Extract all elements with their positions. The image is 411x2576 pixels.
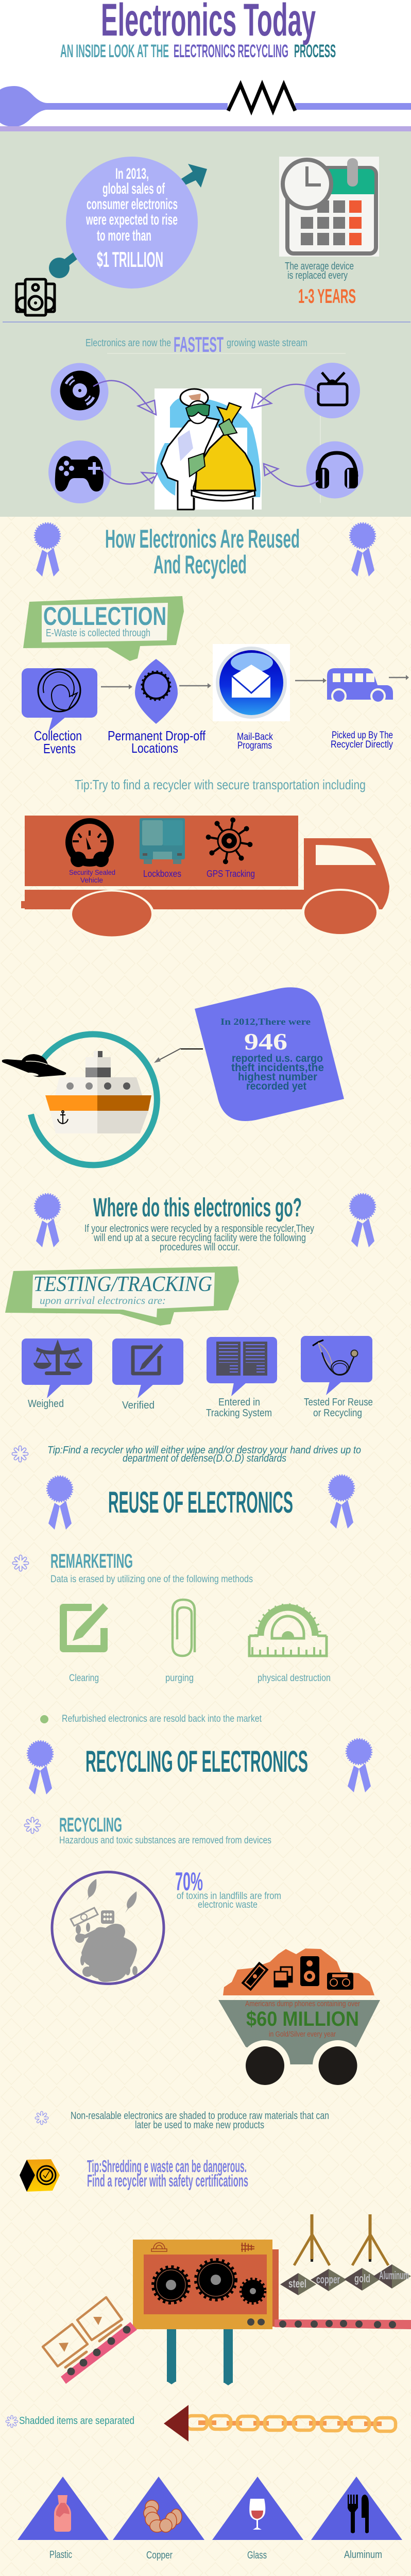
label: entered in tracking system: [206, 1397, 272, 1419]
material: copper: [311, 2269, 347, 2291]
label: clearing: Clearing: [69, 1673, 99, 1684]
illustration: worker holding waste bag: [155, 388, 262, 510]
icon: ribbon left: [35, 1194, 60, 1247]
page background: white header: [0, 0, 411, 131]
tip: wipe or destroy drives: Tip:Find a recycler who will either wipe and/or destroy your hand drives up to: [47, 1445, 361, 1456]
stat bubble: global sales: In 2013,: [115, 165, 149, 182]
card: weighed: [22, 1338, 92, 1398]
label: entered in tracking system: Tracking System: [206, 1408, 272, 1419]
tip: wipe or destroy drives: [47, 1445, 361, 1464]
icon: flower bullet: [14, 1556, 27, 1570]
icon: ribbon right: [346, 1739, 372, 1792]
icon: notebook and pencil: [133, 1344, 163, 1374]
label: glass: Glass: [247, 2550, 267, 2561]
material card: copper: [113, 2477, 204, 2540]
panel: collection speech bubble: E-Waste is collected through: [46, 628, 150, 639]
label: copper: Copper: [146, 2550, 173, 2561]
conveyor: right: [275, 2319, 411, 2329]
icon: bottle: [54, 2495, 71, 2532]
icon: ribbon left: [35, 523, 60, 577]
icon: boombox: [327, 1973, 353, 1990]
text: refurbished electronics: Refurbished electronics are resold back into the market: [62, 1714, 262, 1724]
icon: wine glass: [249, 2499, 265, 2530]
label: picked up by the recycler: [331, 730, 393, 750]
label: permanent drop-off locations: Locations: [131, 740, 178, 756]
icon: flying saucer: [2, 1054, 66, 1077]
text: average device: is replaced every: [287, 270, 348, 281]
label: mail-back programs: Mail-Back: [237, 732, 273, 742]
text: Find a recycler with safety certifications: [87, 2171, 248, 2190]
panel: testing/tracking speech bubble: upon arrival electronics are:: [40, 1294, 166, 1307]
material card: glass: [212, 2477, 303, 2540]
label: aluminum: Aluminum: [344, 2549, 382, 2561]
panel: testing/tracking speech bubble: [5, 1266, 239, 1326]
icon: small protractor: [151, 2243, 167, 2251]
text: toxins in landfills: [177, 1891, 281, 1910]
icon: physical destruction protractor: [249, 1605, 327, 1656]
icon: collection events card: [22, 668, 97, 732]
callout: cargo theft: 946: [244, 1028, 287, 1055]
label: security sealed vehicle: Security Sealed: [69, 868, 115, 876]
text: data erased: Data is erased by utilizing one of the following methods: [50, 1574, 253, 1585]
text: shredded items separated: Shadded items are separated: [19, 2415, 134, 2427]
label: gps tracking: GPS Tracking: [207, 869, 255, 879]
icon: stethoscope: [313, 1340, 357, 1375]
callout: cargo theft: reported u.s. cargo: [232, 1053, 323, 1064]
illustration: shredder machine: [133, 2240, 279, 2385]
text: toxins in landfills: of toxins in landfills are from: [177, 1891, 281, 1902]
arrow: chain pointing left: [164, 2405, 396, 2442]
label: lockboxes: Lockboxes: [143, 869, 181, 879]
callout: cargo theft: [195, 987, 344, 1121]
text: non-resalable electronics: Non-resalable electronics are shaded to produce raw materials that can: [71, 2110, 329, 2122]
text: average device: [285, 261, 354, 281]
icon: flower bullet: [13, 1447, 27, 1461]
circuit line with resistor: [0, 84, 411, 127]
arrow: [295, 678, 327, 683]
icon: purging paperclip: [173, 1600, 195, 1656]
arrow: rising trend: [49, 164, 207, 278]
icon: ship wheel: [202, 814, 256, 868]
text: gold and silver: in Gold/Silver every year: [269, 2030, 336, 2039]
icon: flower bullet: [26, 1819, 39, 1832]
stat bubble: global sales: to more than: [97, 227, 151, 244]
icon: lockbox truck: [140, 818, 185, 864]
illustration: cargo ship in ring: [2, 1034, 157, 1165]
label: collection events: [34, 728, 82, 756]
icon: coins: [144, 2500, 182, 2532]
label: entered in tracking system: Entered in: [218, 1397, 260, 1408]
conveyor: left with boxes: [43, 2297, 137, 2384]
icon: ribbon left: [47, 1477, 72, 1530]
heading: fastest growing waste stream: FASTEST: [174, 332, 224, 357]
label: tested for reuse or recycling: or Recycling: [313, 1408, 362, 1419]
label: collection events: Collection: [34, 728, 82, 743]
callout: cargo theft: In 2012,There were: [220, 1016, 311, 1027]
callout: cargo theft: highest number: [238, 1071, 317, 1083]
panel: collection speech bubble: COLLECTION: [43, 602, 166, 631]
icon: claw left: [294, 2214, 330, 2265]
label: mail-back programs: [237, 732, 273, 751]
heading: fastest growing waste stream: growing waste stream: [227, 337, 307, 349]
icon: ribbon right: [350, 523, 375, 577]
material card: aluminum: [311, 2477, 402, 2540]
label: plastic: Plastic: [49, 2549, 72, 2561]
card: verified: [112, 1338, 183, 1398]
heading: fastest growing waste stream: Electronics are now the: [85, 337, 171, 349]
icon: flower bullet: [36, 2112, 47, 2124]
arrow: [101, 684, 132, 689]
stat bubble: global sales: $1 TRILLION: [97, 247, 163, 272]
card: entered in tracking system: [207, 1337, 277, 1396]
icon: speakers: [16, 279, 55, 315]
stat: 1-3 years: 1-3 YEARS: [298, 285, 356, 308]
label: purging: purging: [165, 1673, 194, 1684]
label: permanent drop-off locations: [108, 728, 206, 756]
stat bubble: global sales: consumer electronics: [87, 196, 178, 213]
material: steel: steel: [288, 2277, 306, 2290]
illustration: truck: [21, 814, 389, 940]
icon: speaker: [300, 1956, 319, 1986]
material: gold: [344, 2268, 380, 2291]
label: weighed: Weighed: [28, 1398, 64, 1410]
illustration: landfill circle: [52, 1872, 164, 1984]
label: mail-back programs: Programs: [237, 740, 272, 751]
label: tested for reuse or recycling: [304, 1397, 373, 1419]
icon: headphones: [306, 441, 364, 499]
material: aluminum: [373, 2264, 411, 2289]
arrow: headphones to worker: [264, 464, 318, 486]
icon: ribbon left: [28, 1741, 53, 1794]
icon: small track: [241, 2243, 254, 2252]
arrow: controller to worker: [101, 469, 157, 484]
text: toxins in landfills: electronic waste: [198, 1900, 258, 1910]
label: permanent drop-off locations: Permanent Drop-off: [108, 728, 206, 743]
heading: recycling: RECYCLING: [59, 1814, 122, 1836]
text: americans dump phones: Americans dump phones containing over: [245, 1999, 360, 2008]
text: facility intro: [84, 1223, 314, 1253]
icon: vinyl record: [50, 363, 108, 420]
arrow: [389, 675, 409, 680]
label: tested for reuse or recycling: Tested For Reuse: [304, 1397, 373, 1408]
label: verified: Verified: [122, 1400, 155, 1411]
icon: ribbon right: [329, 1476, 354, 1529]
page background: sage intro panel: [0, 131, 411, 517]
stat: 60 million: $60 MILLION: [246, 2008, 359, 2030]
text: facility intro: If your electronics were recycled by a responsible recycler,They: [84, 1223, 314, 1234]
material: gold: gold: [354, 2272, 370, 2285]
illustration: mine cart of electronics: [218, 1948, 380, 2091]
stat: 70 percent: 70%: [175, 1867, 203, 1896]
icon: newspaper: [216, 1342, 267, 1376]
label: picked up by the recycler: Recycler Directly: [331, 739, 393, 750]
callout: cargo theft: theft incidents,the: [231, 1062, 324, 1074]
callout: cargo theft: recorded yet: [246, 1080, 306, 1092]
tip: wipe or destroy drives: department of defense(D.O.D) standards: [123, 1453, 286, 1464]
subtitle: ELECTRONICS RECYCLING: [174, 41, 288, 61]
icon: photos: [275, 1967, 292, 1987]
icon: banknote: [241, 1962, 269, 1991]
heading: how electronics are reused: And Recycled: [153, 550, 247, 579]
material: copper: copper: [316, 2273, 340, 2286]
icon: scales: [33, 1340, 82, 1375]
label: collection events: Events: [43, 741, 76, 756]
label: physical destruction: physical destruction: [258, 1673, 331, 1684]
icon: anchor: [58, 1111, 68, 1124]
icon: bus: [327, 668, 393, 703]
label: picked up by the recycler: Picked up By The: [332, 730, 393, 741]
lavender band: [0, 126, 411, 131]
card: tested for reuse: [301, 1336, 372, 1395]
icon: flower bullet: [7, 2416, 17, 2427]
icon: television: [304, 363, 360, 418]
icon: mail button: [213, 644, 290, 721]
icon: clearing notebook: [63, 1603, 108, 1649]
heading: how electronics are reused: [105, 524, 300, 579]
panel: collection speech bubble: [23, 596, 184, 661]
icon: calendar and clock: [279, 157, 379, 257]
material card: plastic: [18, 2477, 109, 2540]
text: non-resalable electronics: later be used to make new products: [135, 2120, 264, 2131]
stat bubble: global sales: [66, 157, 198, 289]
label: security sealed vehicle: Vehicle: [80, 876, 103, 884]
bullet: green dot: [40, 1715, 48, 1723]
text: PROCESS: [294, 41, 336, 61]
text: facility intro: procedures will occur.: [160, 1242, 240, 1253]
text: average device: The average device: [285, 261, 354, 272]
icon: drop-off location pin: [135, 659, 178, 724]
subtitle: AN INSIDE LOOK AT THE: [60, 41, 169, 61]
arrow: tv to worker: [252, 384, 320, 408]
panel: testing/tracking speech bubble: TESTING/TRACKING: [33, 1273, 212, 1296]
arrow: [179, 683, 211, 688]
arrow: vinyl to worker: [93, 381, 156, 415]
icon: gauge: [65, 818, 114, 867]
label: security sealed vehicle: [69, 868, 115, 884]
icon: gears: [153, 2260, 265, 2303]
heading: fastest growing waste stream: [85, 332, 346, 357]
text: non-resalable electronics: [71, 2110, 329, 2131]
text: facility intro: will end up at a secure recycling facility were the following: [93, 1232, 306, 1244]
tip: shredding is dangerous: [87, 2157, 248, 2190]
icon: claw right: [352, 2214, 388, 2265]
material: steel: [280, 2273, 316, 2295]
arrow: callout to ship: [154, 1048, 203, 1063]
icon: safety hexagon badge: [20, 2159, 60, 2192]
heading: remarketing: REMARKETING: [50, 1550, 133, 1572]
stat bubble: global sales: were expected to rise: [85, 211, 178, 228]
text: hazardous substances: Hazardous and toxic substances are removed from devices: [59, 1835, 271, 1846]
icon: fork and knife: [348, 2495, 369, 2533]
page background: cream process panel: [0, 517, 411, 2576]
stat bubble: global sales: global sales of: [102, 180, 165, 197]
icon: game controller: [48, 440, 111, 503]
icon: ribbon right: [350, 1194, 375, 1247]
